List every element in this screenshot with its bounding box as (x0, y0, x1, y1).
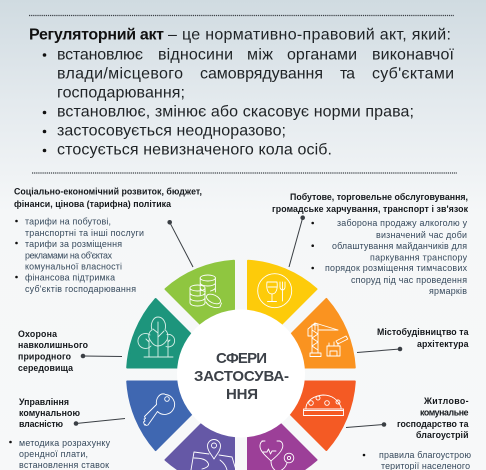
bullets: тарифи на побутові, (25, 216, 111, 226)
heading: Житлово- (423, 396, 469, 406)
icon: map with pin (191, 440, 236, 470)
bullets: тарифи за розміщення (25, 239, 122, 249)
bullets: ярмарків (429, 286, 467, 296)
bullets: заборона продажу алкоголю у (337, 218, 468, 228)
heading: Соціально-економічний розвиток, бюджет, (14, 186, 202, 196)
icon: construction crane (308, 323, 348, 356)
bullet: методика розрахунку (19, 438, 111, 448)
callout: housing and utilities: комунальне (420, 408, 469, 418)
segment: orange (274, 299, 375, 400)
callout: urban planning: архітектура (417, 339, 469, 349)
heading: Управління (19, 397, 69, 407)
bullet list of properties: стосується невизначеного кола осіб. (57, 142, 332, 158)
definition lead line: – це нормативно-правовий акт, який: (168, 26, 451, 44)
bullet list of properties: влади/місцевого (57, 66, 183, 82)
bullets: паркування транспору (370, 252, 468, 262)
bullet list of properties: встановлює (57, 46, 143, 64)
callout: socio-economic development (14, 186, 202, 294)
bullet list of properties: самоврядування (200, 66, 323, 82)
bullets (15, 216, 144, 294)
connector: green segment (167, 220, 193, 267)
bullets: суб'єктів господарювання (25, 284, 136, 294)
dotted divider top (29, 14, 454, 16)
bullet list of properties (43, 46, 455, 158)
segment: violet (166, 414, 234, 470)
bullet list of properties: органами (287, 46, 357, 64)
wheel of spheres (107, 241, 375, 470)
definition lead line (29, 26, 451, 44)
callout: housing and utilities: благоустрій (416, 430, 468, 440)
bullet list of properties: виконавчої (372, 46, 455, 64)
callout: urban planning (377, 327, 469, 349)
connector: yellow segment (289, 215, 305, 267)
bullets: комунальної власності (25, 262, 122, 272)
callout: environment protection: Охорона (18, 329, 57, 339)
callout: environment protection (18, 329, 89, 373)
definition lead line: Регуляторний акт (29, 26, 164, 44)
callout: household services (272, 192, 469, 296)
bullet list of properties: та (340, 66, 355, 82)
segment: magenta (216, 408, 317, 470)
callout: environment protection: природного (18, 352, 72, 362)
center title: ННЯ (226, 386, 258, 403)
segment: teal (127, 299, 201, 368)
bullet list of properties: господарювання; (57, 84, 185, 102)
bullet: встановлення ставок (19, 460, 109, 470)
icon: flower bed (304, 395, 344, 416)
icon: trees (138, 317, 175, 357)
segment: blue (107, 349, 208, 450)
center circle (177, 310, 305, 438)
center title: СФЕРИ (216, 350, 267, 367)
segment: red (281, 382, 355, 450)
bullet list of properties: суб'єктами (372, 66, 454, 82)
callout: socio-economic development: фінанси, цінова (тарифна) політика (14, 199, 171, 209)
bullet (9, 438, 111, 470)
callout: environment protection: середовища (18, 363, 73, 373)
center title: ЗАСТОСУВА- (194, 368, 289, 385)
icon: coins (190, 275, 222, 308)
bullet list of properties: між (247, 46, 273, 64)
bullets: визначений час доби (376, 230, 467, 240)
segment: yellow (248, 261, 316, 335)
icon: key (144, 394, 175, 426)
icon: food and drink (258, 274, 292, 308)
bullets: фінансова підтримка (25, 272, 115, 282)
bullets: споруд під час проведення (351, 275, 467, 285)
dotted divider bottom (32, 172, 457, 174)
callout: housing and utilities: господарство та (397, 419, 469, 429)
callout: household services: громадське харчування, транспорт і зв'язок (272, 204, 469, 214)
bullets: транспортні та інші послуги (25, 228, 144, 238)
segment: green (165, 241, 266, 341)
definition text block (29, 26, 455, 158)
bullet (363, 450, 471, 470)
bullet: правила благоустрою (379, 450, 471, 460)
callout: municipal property: комунальною (19, 408, 80, 418)
callout: municipal property: власністю (19, 419, 63, 429)
bullets: облаштування майданчиків для (332, 241, 467, 251)
connector: teal segment (81, 354, 122, 358)
connector: blue segment (74, 418, 125, 426)
connector: red segment (346, 422, 386, 428)
callout: municipal property (9, 397, 111, 470)
bullet list of properties: відносини (158, 46, 233, 64)
bullets: порядок розміщення тимчасових (325, 263, 468, 273)
bullets: рекламами на об'єктах (25, 250, 113, 260)
bullet list of properties: встановлює, змінює або скасовує норми права; (57, 104, 414, 120)
bullets (311, 218, 468, 296)
bullet: орендної плати, (19, 449, 88, 459)
icon: stethoscope (260, 441, 294, 470)
callout: housing and utilities (363, 396, 471, 470)
center title (194, 350, 289, 403)
heading: Побутове, торговельне обслуговування, (290, 192, 468, 202)
callout: urban planning: Містобудівництво та (377, 327, 469, 337)
connector: orange segment (357, 347, 402, 352)
callout: environment protection: навколишнього (18, 340, 89, 350)
bullet list of properties: застосовується неодноразово; (57, 122, 286, 140)
